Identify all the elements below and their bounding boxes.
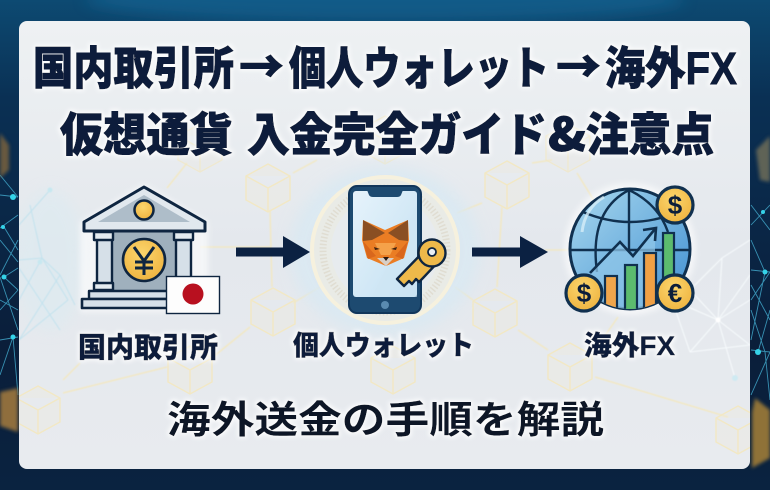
globe <box>570 189 690 309</box>
icon: japan flag <box>166 276 220 314</box>
icon: globe with chart <box>564 183 696 317</box>
icon: globe with chart: $ <box>668 190 683 220</box>
icon: fox <box>362 220 409 266</box>
title line 2: 入金完全ガイド <box>247 109 547 161</box>
icon: key <box>397 240 446 286</box>
coins <box>566 187 693 311</box>
bank columns <box>94 232 193 290</box>
title line 1: 海外FX <box>605 43 737 94</box>
title <box>33 31 737 165</box>
title line 2: & <box>548 99 586 165</box>
bank steps <box>89 291 199 299</box>
trend arrow <box>590 229 655 273</box>
blockchain lines <box>63 160 728 417</box>
label: personal wallet: 個人ウォレット <box>293 331 474 361</box>
yen coin <box>123 239 165 281</box>
panel network glow <box>16 188 750 381</box>
icon: globe with chart: $ <box>577 278 592 308</box>
arrow 1 <box>236 236 310 268</box>
label: overseas FX: 海外FX <box>584 331 675 361</box>
gold cubes at edges <box>0 133 770 468</box>
network: right edge <box>751 205 770 400</box>
bank walls <box>111 231 176 291</box>
title line 1: 個人ウォレット <box>289 43 549 94</box>
title line 2: 仮想通貨 <box>60 109 233 161</box>
title line 1: → <box>239 31 284 96</box>
blockchain cubes <box>16 116 760 454</box>
title line 2 <box>60 99 714 165</box>
icon: phone wallet <box>349 186 446 313</box>
bars <box>605 233 674 317</box>
icon: bank <box>80 184 208 312</box>
network: left edge <box>0 175 18 395</box>
coin behind phone <box>290 166 480 336</box>
subtitle: 海外送金の手順を解説 <box>167 400 604 442</box>
bank roof <box>84 187 205 231</box>
title line 1: 国内取引所 <box>33 43 234 94</box>
label: domestic exchange: 国内取引所 <box>78 332 218 363</box>
arrow 2 <box>472 236 548 268</box>
title line 1 <box>33 31 737 96</box>
icon: globe with chart: € <box>668 278 682 308</box>
title line 1: → <box>556 31 601 96</box>
title line 2: 注意点 <box>586 109 714 161</box>
